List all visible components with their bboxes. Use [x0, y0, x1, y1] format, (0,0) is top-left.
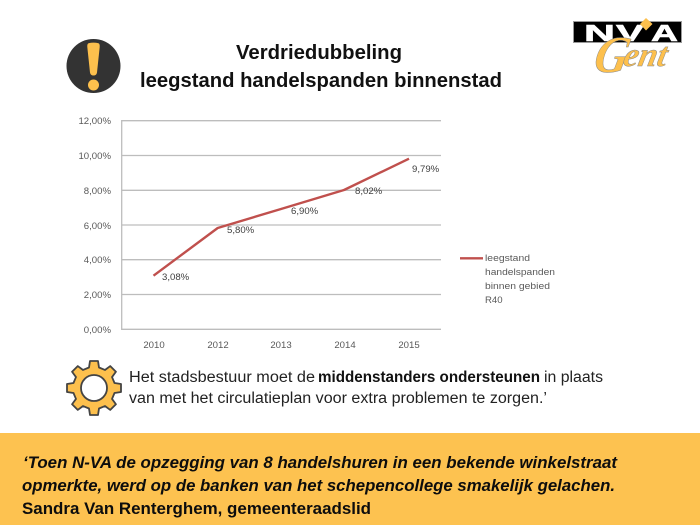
data labels: 6,90% [291, 206, 319, 217]
y-axis labels: 8,00% [84, 186, 111, 197]
logo: N-VA Gent: G [589, 27, 636, 84]
y-axis labels: 4,00% [84, 255, 111, 266]
legend: handelspanden [485, 267, 555, 278]
legend [460, 253, 555, 306]
statement text [129, 369, 603, 407]
statement text: van met het circulatieplan voor extra problemen te zorgen.’ [129, 390, 547, 407]
gridlines and axes [122, 120, 441, 330]
icon: exclamation mark [66, 39, 120, 93]
panel: quote banner [0, 433, 700, 525]
title [140, 41, 502, 92]
title: Verdriedubbeling [236, 41, 402, 64]
y-axis labels [78, 116, 111, 336]
x-axis labels [143, 340, 420, 351]
x-axis labels: 2010 [143, 340, 165, 351]
x-axis labels: 2014 [334, 340, 356, 351]
quote text: opmerkte, werd op de banken van het schepencollege smakelijk gelachen. [22, 477, 615, 495]
logo: N-VA Gent: N [584, 20, 615, 46]
statement text: middenstanders ondersteunen [318, 369, 540, 386]
quote text: Sandra Van Renterghem, gemeenteraadslid [22, 500, 371, 518]
y-axis labels: 10,00% [78, 151, 111, 162]
legend: R40 [485, 295, 503, 306]
logo: N-VA Gent [574, 18, 682, 84]
x-axis labels: 2013 [270, 340, 292, 351]
legend: leegstand [485, 253, 530, 264]
y-axis labels: 2,00% [84, 290, 111, 301]
y-axis labels: 12,00% [78, 116, 111, 127]
logo: N-VA Gent: ent [620, 36, 673, 74]
data labels: 9,79% [412, 164, 440, 175]
line chart: leegstand 2010-2015 [78, 116, 555, 351]
x-axis labels: 2012 [207, 340, 229, 351]
logo: N-VA Gent: V [616, 20, 645, 46]
quote text [22, 454, 619, 518]
logo: N-VA Gent: A [651, 20, 678, 46]
y-axis labels: 0,00% [84, 325, 111, 336]
x-axis labels: 2015 [398, 340, 420, 351]
icon: gear [67, 361, 121, 415]
data labels: 5,80% [227, 225, 255, 236]
quote text: ‘Toen N-VA de opzegging van 8 handelshuren in een bekende winkelstraat [23, 454, 619, 472]
data line [154, 159, 409, 276]
data labels [162, 164, 440, 283]
data labels: 8,02% [355, 186, 383, 197]
statement text: Het stadsbestuur moet de [129, 369, 315, 386]
data labels: 3,08% [162, 272, 190, 283]
statement text: in plaats [544, 369, 603, 386]
y-axis labels: 6,00% [84, 221, 111, 232]
title: leegstand handelspanden binnenstad [140, 69, 502, 92]
legend: binnen gebied [485, 281, 550, 292]
